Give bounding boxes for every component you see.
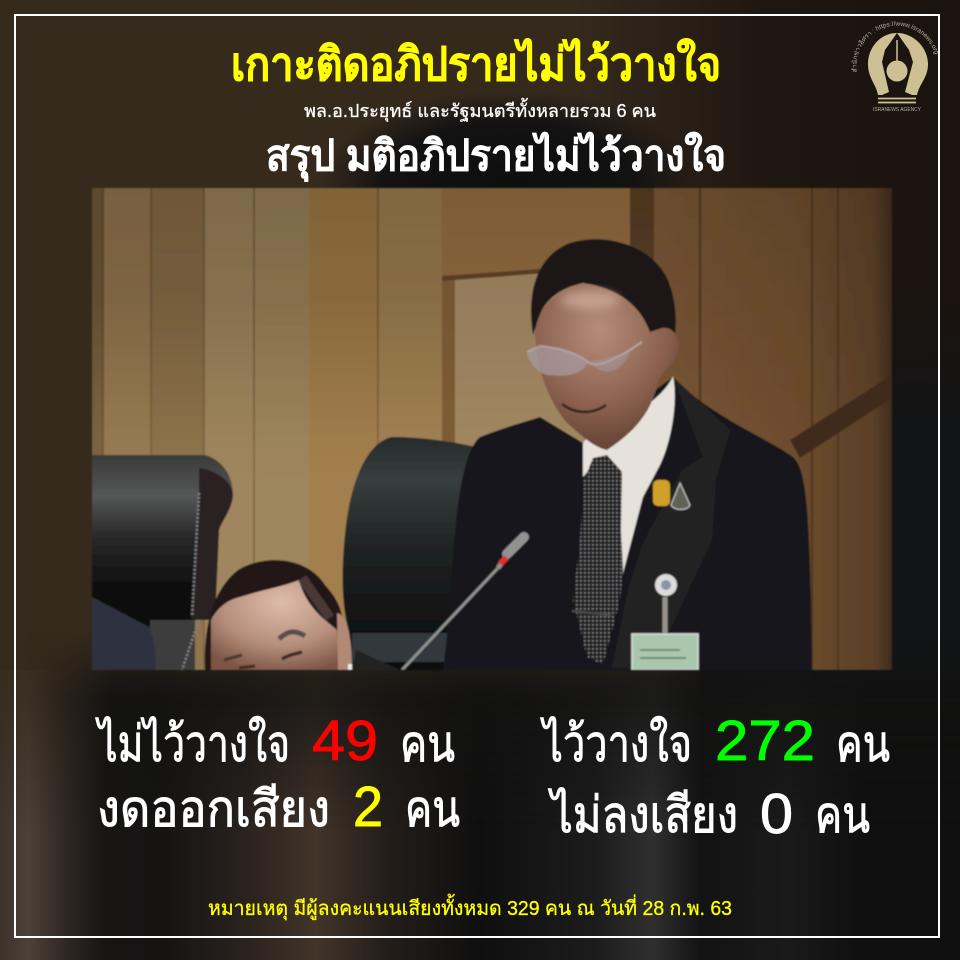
- stat: confidence 272: ไว้วางใจ: [540, 716, 692, 772]
- right chair: [343, 437, 476, 670]
- left chair: [92, 455, 233, 670]
- microphone: [402, 537, 524, 670]
- stat: confidence 272: 272: [715, 709, 815, 773]
- photo: prime minister at parliament: [92, 188, 892, 670]
- shirt and collar: [583, 376, 675, 577]
- ID badge reel and card: [632, 574, 698, 670]
- title: เกาะติดอภิปรายไม่ไว้วางใจ: [231, 37, 721, 90]
- stat: no confidence 49: [95, 709, 455, 773]
- stat: not voting 0: ไม่ลงเสียง: [548, 787, 738, 843]
- lapel: [612, 377, 730, 668]
- necktie: [573, 455, 623, 665]
- tie bar: [572, 611, 611, 615]
- subtitle: พล.อ.ประยุทธ์ และรัฐมนตรีทั้งหลายรวม 6 คน: [304, 98, 656, 122]
- stat: abstain 2: 2: [353, 775, 383, 839]
- logo: Isranews Agency: ISRANEWS AGENCY: [873, 107, 921, 113]
- stat: no confidence 49: คน: [400, 716, 455, 772]
- stat: not voting 0: คน: [815, 787, 870, 843]
- glasses: [527, 342, 642, 364]
- mouth: [562, 404, 606, 412]
- stat: no confidence 49: 49: [312, 709, 378, 773]
- stat: not voting 0: [548, 782, 870, 846]
- wood wall: [92, 188, 892, 670]
- stat: confidence 272: [540, 709, 890, 773]
- stat: no confidence 49: ไม่ไว้วางใจ: [95, 716, 290, 772]
- stat: not voting 0: 0: [760, 782, 793, 846]
- standing man's suit: [443, 377, 812, 670]
- stat: abstain 2: คน: [405, 781, 460, 837]
- stat: confidence 272: คน: [836, 716, 890, 772]
- lapel pins: [653, 480, 690, 510]
- heading: motion summary: สรุป มติอภิปรายไม่ไว้วางใจ: [266, 131, 726, 182]
- stat: abstain 2: [97, 775, 460, 839]
- seated man's head: [205, 560, 400, 670]
- stat: abstain 2: งดออกเสียง: [97, 781, 330, 837]
- logo: Isranews Agency: สำนักข่าวอิศรา : https://www.isranews.org: [851, 21, 938, 72]
- head and face: [527, 239, 678, 450]
- logo: Isranews Agency: [851, 21, 938, 113]
- footnote: หมายเหตุ มีผู้ลงคะแนนเสียงทั้งหมด 329 คน ณ วันที่ 28 ก.พ. 63: [208, 894, 732, 921]
